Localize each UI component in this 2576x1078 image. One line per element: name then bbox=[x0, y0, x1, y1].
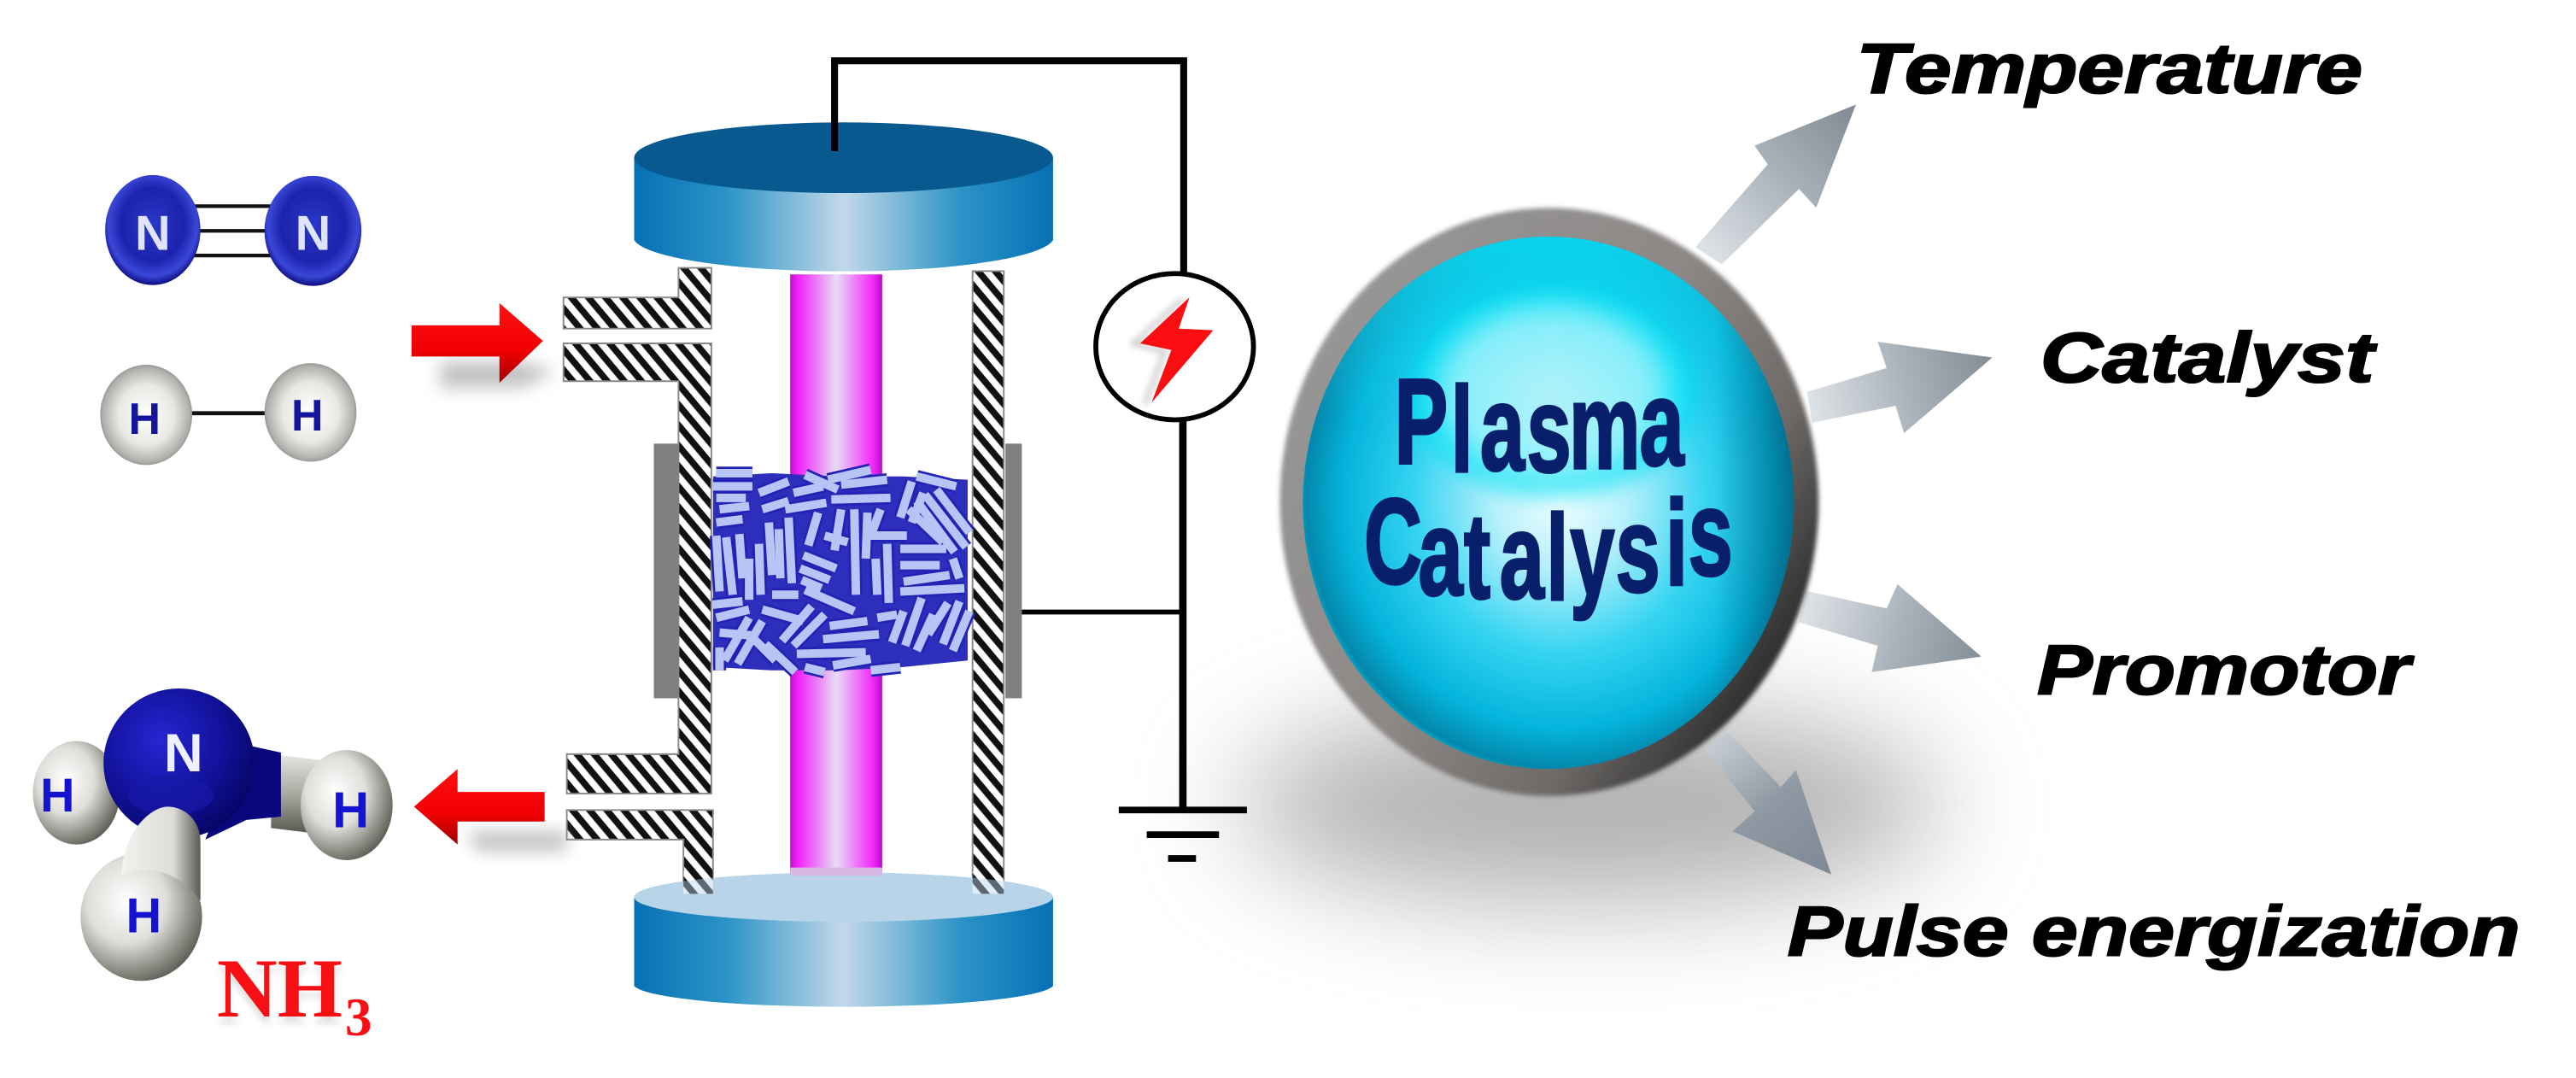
sphere rim bbox=[1279, 208, 1818, 796]
label: Catalyst: Catalyst bbox=[2040, 318, 2378, 397]
sphere core bbox=[1303, 237, 1794, 769]
shadow under plasma catalysis sphere bbox=[1237, 710, 1943, 900]
arrow: to Pulse energization bbox=[1705, 732, 1831, 875]
sphere inner dome glow bbox=[1402, 279, 1704, 503]
molecule: NH3: N bbox=[164, 724, 203, 783]
left hydrogen bbox=[32, 741, 120, 845]
reappearing wall feet on bottom plate bbox=[683, 870, 1004, 893]
molecule: NH3: H bbox=[40, 769, 74, 822]
molecule: NH3 bbox=[32, 688, 393, 981]
molecule: NH3: H bbox=[332, 781, 369, 838]
sphere title: Catalysis bbox=[1364, 466, 1733, 626]
bond to right hydrogen bbox=[271, 754, 325, 835]
panel: dielectric barrier reactor bbox=[564, 122, 1053, 1007]
right outer electrode bbox=[1005, 443, 1022, 698]
molecule: N2: N bbox=[135, 206, 171, 261]
sphere top highlight bbox=[1303, 237, 1794, 769]
label: NH3: 3 bbox=[345, 987, 372, 1047]
arrow: to Temperature bbox=[1695, 104, 1856, 265]
circuit wires and power supply bbox=[834, 61, 1254, 858]
ground symbol bbox=[1119, 810, 1247, 858]
plasma discharge tube bbox=[790, 274, 882, 876]
catalyst packed bed bbox=[713, 470, 969, 672]
sphere title: Plasma bbox=[1395, 354, 1684, 498]
top electrode plate bbox=[634, 122, 1053, 272]
wire from top plate to power source bbox=[834, 61, 1184, 274]
right hydrogen bbox=[301, 750, 393, 860]
label: Temperature: Temperature bbox=[1857, 29, 2362, 108]
molecule: H2 bbox=[100, 363, 356, 465]
left outer electrode bbox=[654, 443, 678, 698]
wire from power source to ground bbox=[1181, 420, 1185, 808]
molecule: N2 bbox=[105, 175, 361, 286]
left reactor wall with gas ports bbox=[564, 268, 713, 893]
wire from electrode to ground line bbox=[1022, 611, 1183, 613]
nitrogen atom bbox=[103, 688, 281, 840]
arrow: to Catalyst bbox=[1807, 342, 1993, 433]
molecule: H2: H bbox=[129, 395, 161, 444]
pink tube foot on bottom plate bbox=[790, 868, 882, 876]
molecule: N2: N bbox=[296, 206, 331, 261]
plasma catalysis sphere bbox=[1279, 208, 1818, 796]
icon: lightning bolt bbox=[1133, 297, 1213, 404]
right reactor wall bbox=[973, 271, 1004, 893]
molecule: NH3: H bbox=[126, 889, 161, 944]
label: NH3: NH bbox=[217, 950, 342, 1042]
molecule: H2: H bbox=[291, 391, 323, 441]
sphere right-side shading bbox=[1303, 237, 1794, 769]
power source circle bbox=[1096, 273, 1254, 419]
sphere title bbox=[1364, 354, 1733, 626]
label: Promotor: Promotor bbox=[2037, 630, 2414, 710]
label: NH3: NH bbox=[217, 943, 342, 1035]
arrow: product outlet bbox=[414, 769, 567, 851]
arrow: to Promotor bbox=[1799, 584, 1982, 672]
bottom electrode plate bbox=[634, 872, 1053, 1007]
bottom hydrogen with bond bbox=[80, 806, 202, 981]
arrow: reactant inlet bbox=[412, 303, 555, 388]
label: Pulse energization: Pulse energization bbox=[1788, 892, 2520, 971]
